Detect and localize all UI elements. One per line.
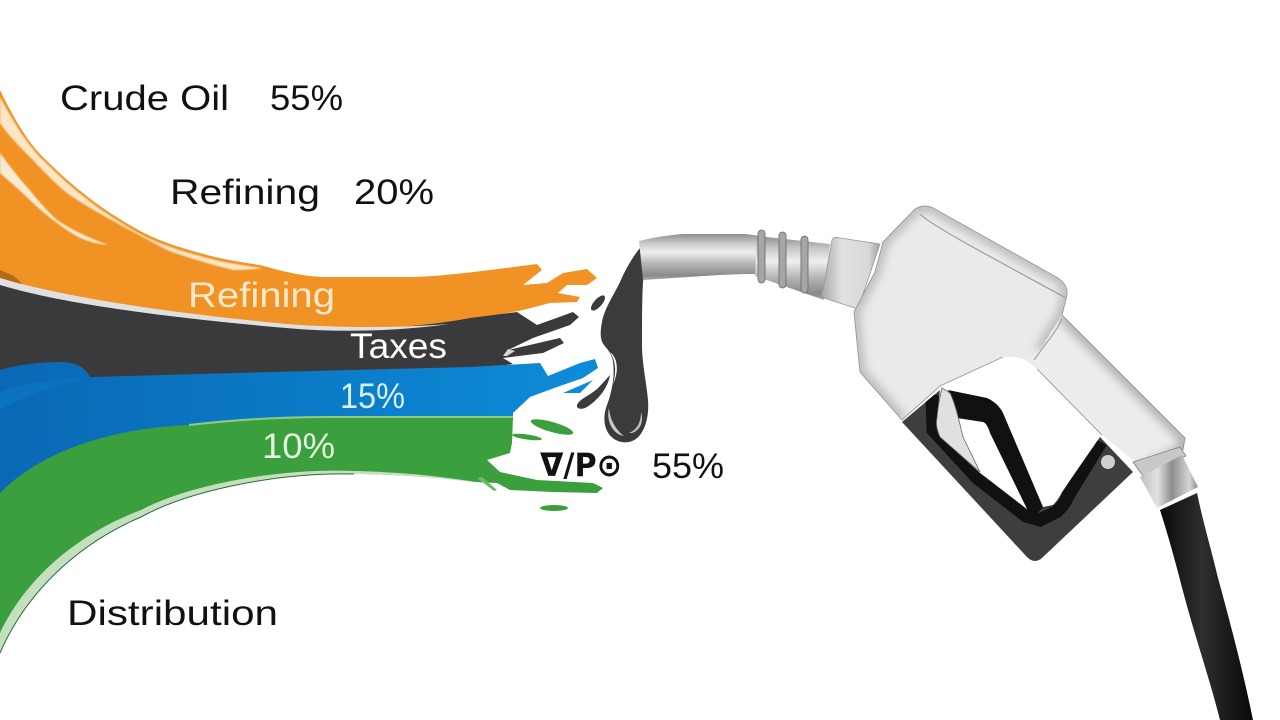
nozzle collar <box>822 237 880 309</box>
stream: green <box>0 416 603 653</box>
label: refining: Refining <box>170 173 320 212</box>
handle ferrule ring <box>1133 447 1186 476</box>
main body <box>854 206 1067 420</box>
label: distribution: Distribution <box>67 594 278 633</box>
label: crude oil: 55% <box>270 79 343 118</box>
label on blue stream: 15% <box>340 377 405 416</box>
nozzle neck rings <box>755 230 830 300</box>
stream: taxes dark <box>0 278 579 382</box>
label: garbled glyphs and percentage: ᐁ/P⊙ <box>540 446 622 484</box>
label on orange stream: Refining <box>188 276 335 315</box>
label: refining: 20% <box>354 173 434 212</box>
label: crude oil: Crude Oil <box>60 79 229 118</box>
label: garbled glyphs and percentage <box>540 446 724 486</box>
stream: blue <box>0 359 598 496</box>
black trigger guard <box>902 390 1133 561</box>
label: crude oil <box>60 79 343 118</box>
trigger silver lever <box>936 388 980 472</box>
nozzle spout <box>639 234 760 280</box>
label: refining <box>170 173 434 212</box>
guard pin <box>1101 455 1115 469</box>
stream: crude oil orange <box>0 90 597 332</box>
green splash drops <box>477 416 575 511</box>
hose collar <box>1140 455 1198 508</box>
oil drip from spout <box>577 248 648 442</box>
label on dark stream: Taxes <box>350 327 447 366</box>
label on green stream: 10% <box>262 427 335 466</box>
handle body <box>1024 315 1185 470</box>
nozzle: pump handle <box>639 206 1198 561</box>
fuel hose <box>1160 493 1253 720</box>
cream inner streak <box>0 153 108 245</box>
trigger <box>948 390 1043 514</box>
cream highlight band <box>0 97 262 270</box>
label: garbled glyphs and percentage: 55% <box>652 447 724 486</box>
small oil drops <box>577 293 610 409</box>
